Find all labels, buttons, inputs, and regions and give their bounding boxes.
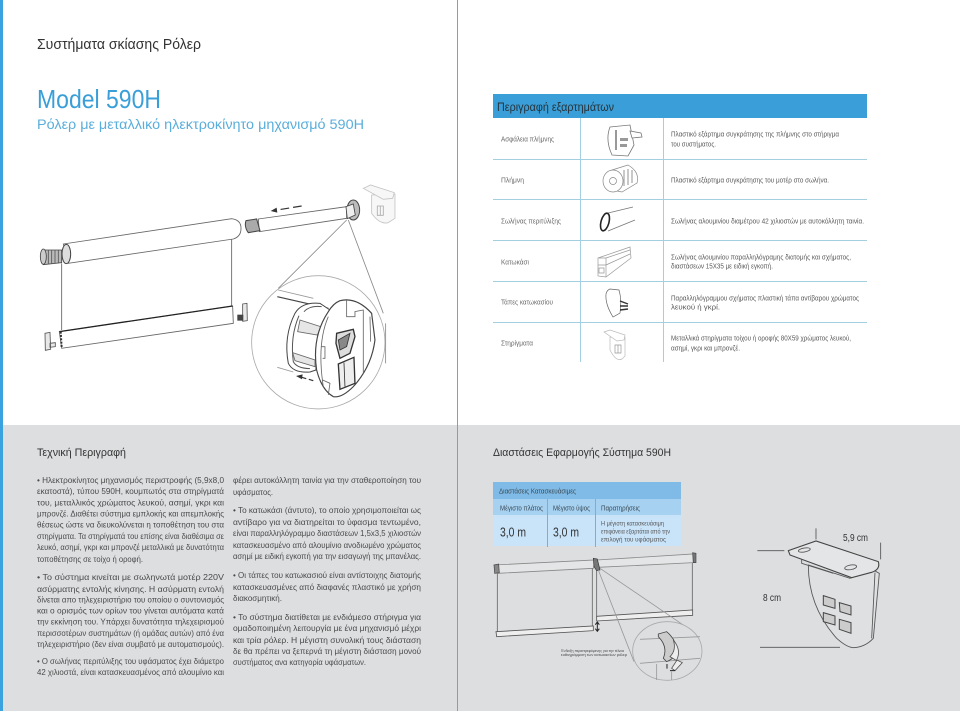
text block: right column xyxy=(233,475,421,667)
table heading: Περιγραφή εξαρτημάτων xyxy=(497,100,614,114)
notes text: Η μέγιστη κατασκευάσιμη xyxy=(601,520,664,528)
text block: right column: αντίβαρο για να διατηρείται το ύφασμα τεντωμένο, xyxy=(233,517,421,527)
centre bracket xyxy=(593,558,600,571)
left roller xyxy=(494,560,595,573)
text block: right column: υφάσματος. xyxy=(233,487,273,497)
icon: safety clip xyxy=(608,125,642,156)
icon: tube xyxy=(599,207,635,232)
bracket dimension drawing xyxy=(757,528,881,648)
notes text xyxy=(601,520,670,544)
dimension lines xyxy=(757,528,881,647)
text block: right column: διακοσμητική. xyxy=(233,593,282,603)
notes text: επιλογή του υφάσματος xyxy=(601,536,666,544)
row: bar caps: Παραλληλόγραμμου σχήματος πλαστική τάπα αντίβαρου χρώματος xyxy=(671,294,860,302)
row: bar caps: λευκού ή γκρί. xyxy=(671,304,720,312)
tube opening xyxy=(62,244,71,264)
text block: right column: ομαδοποιημένη λειτουργία με ένα μηχανισμό μέχρι xyxy=(233,623,421,633)
table header xyxy=(493,94,867,118)
text block: left column: ασύρματης εντολής κίνησης. Η ασύρματη εντολή xyxy=(37,584,224,594)
text block: right column: ασημί με ειδική εγκοπή για την εισαγωγή της μπανέλας. xyxy=(233,551,421,561)
text block: left column: τηλεχειριστήριο (δεν είναι συμβατό με αυτοματισμούς). xyxy=(37,639,224,649)
section title: Συστήματα σκίασης Ρόλερ xyxy=(37,37,201,53)
double arrow xyxy=(595,622,599,631)
text block: right column: συστήματος ανα κατηγορία υφάσματων. xyxy=(233,657,366,667)
icon: bar cap xyxy=(606,289,628,317)
row: plug: Πλαστικό εξάρτημα συγκράτησης του μοτέρ στο σωλήνα. xyxy=(671,176,829,184)
exploded roller diagram xyxy=(40,185,395,409)
dashed arrow xyxy=(275,206,302,210)
row: brackets: Στηρίγματα xyxy=(501,340,533,348)
motor tube xyxy=(258,207,347,232)
text block: right column: δε θα πρέπει να ξεπερνά τη μέγιστη διάσταση μονού xyxy=(233,646,421,656)
text block: left column: του, μεταλλικός χρώματος λευκού, ασημί, γκρι και xyxy=(37,498,224,508)
text block: left column: και ο ορισμός των ορίων του γίνεται αυτόματα κατά xyxy=(37,606,224,616)
row: plug xyxy=(501,176,829,184)
max height header: Μέγιστο ύψος xyxy=(553,504,590,512)
max height value: 3,0 m xyxy=(553,524,579,540)
text block: left column: λευκό, ασημί, γκρι και μπρονζέ μεταλλικά με δυνατότητα xyxy=(37,542,224,552)
roller tube xyxy=(63,219,241,263)
height label: 8 cm xyxy=(763,593,781,604)
row: safety: του συστήματος. xyxy=(671,142,716,148)
body xyxy=(315,300,375,397)
row: plug: Πλήμνη xyxy=(501,178,524,184)
detail circle xyxy=(252,276,385,409)
fabric edges xyxy=(62,239,232,330)
text block: right column: είναι παραλληλόγραμμο διαστάσεων 1,5x3,5 χιλιοστών xyxy=(233,528,421,538)
text block: left column: • Το σύστημα κινείται με σωληνωτά μοτέρ 220V xyxy=(37,572,224,582)
row: brackets: Μεταλλικά στηρίγματα τοίχου ή οροφής 80Χ59 χρώματος λευκού, xyxy=(671,334,851,342)
row: safety: Πλαστικό εξάρτημα συγκράτησης της πλήμνης στο στήριγμα xyxy=(671,130,839,138)
max width header: Μέγιστο πλάτος xyxy=(500,504,543,512)
fine print note xyxy=(560,649,627,657)
bracket plate xyxy=(788,541,879,578)
icon: plug xyxy=(603,165,638,192)
text block: left column: την εκκίνηση του. Υπάρχει δυνατότητα τηλεχειρισμού xyxy=(37,616,224,626)
fine print note: ευθυγράμμιση των κατωκασίων ρόλερ xyxy=(561,653,627,657)
right end cap xyxy=(243,303,247,321)
model subtitle: Ρόλερ με μεταλλικό ηλεκτροκίνητο μηχανισμό 590H xyxy=(37,116,364,132)
text block: left column: τοποθέτησης σε τοίχο ή οροφή. xyxy=(37,554,143,564)
width label: 5,9 cm xyxy=(843,533,868,544)
row: tube: Σωλήνας αλουμινίου διαμέτρου 42 χιλιοστών με αυτοκόλλητη ταινία. xyxy=(671,218,864,226)
text block: right column: • Το κατωκάσι (άντυτο), το οποίο χρησιμοποιείται ως xyxy=(233,505,421,515)
row: bar caps: Τάπες κατωκασίου xyxy=(501,298,553,306)
twin roller diagram xyxy=(494,553,702,680)
model title: Model 590H xyxy=(37,84,161,114)
heading: application dimensions: Διαστάσεις Εφαρμογής Σύστημα 590H xyxy=(493,447,671,459)
left blue edge bar xyxy=(0,0,3,711)
icon: bracket xyxy=(604,330,625,360)
heading: technical description: Τεχνική Περιγραφή xyxy=(37,447,126,459)
header text block xyxy=(37,37,364,132)
row: brackets: ασημί, γκρι και μπρονζέ. xyxy=(671,344,740,352)
row: bottom bar xyxy=(501,254,851,270)
max width value: 3,0 m xyxy=(500,524,526,540)
text block: right column: κατασκευασμένες από διαφανές πλαστικό με χρήση xyxy=(233,582,421,592)
row: tube: Σωλήνας περιτύλιξης xyxy=(501,218,562,226)
text block: right column: φέρει αυτοκόλλητη ταινία για την σταθεροποίηση του xyxy=(233,475,421,485)
callout lines xyxy=(598,568,687,662)
row: bottom bar: διαστάσεων 15Χ35 με ειδική εγκοπή. xyxy=(671,262,773,270)
row: brackets xyxy=(501,334,851,352)
text block: left column: εκατοστά), τύπου 590H, κουμπωτός στα στηρίγματά xyxy=(37,486,224,496)
panel: parts table xyxy=(493,94,867,362)
row: bottom bar: Κατωκάσι xyxy=(501,258,529,266)
fine print note: Ένδειξη περιστρεφόμενης για την τέλεια xyxy=(560,649,624,653)
text block: left column: δίνεται απο τηλεχειριστήριο του οποίου ο συντονισμός xyxy=(37,594,224,604)
text block: right column: • Το σύστημα διατίθεται με ενδιάμεσο στήριγμα για xyxy=(233,612,421,622)
text block: right column: • Οι τάπες του κατωκασιού είναι αντίστοιχης διατομής xyxy=(233,570,421,580)
box xyxy=(338,357,355,389)
text block: left column: • Ο σωλήνας περιτύλιξης του υφάσματος έχει διάμετρο xyxy=(37,656,224,666)
left end cap xyxy=(45,332,55,350)
text block: left column: 42 χιλιοστά, είναι κατασκευασμένος από αλουμίνιο και xyxy=(37,667,224,677)
text block: right column: κατασκευασμένο από αλουμίνιο ανοδιωμένο χρώματος xyxy=(233,540,421,550)
panel: maximum dimensions table xyxy=(493,482,681,547)
row: bar caps xyxy=(501,294,860,312)
text block: left column: περισσοτέρων συστημάτων (ή ομάδας αυτών) από ένα xyxy=(37,628,224,638)
text block: left column: • Ηλεκτροκίνητος μηχανισμός περιστροφής (5,9x8,0 xyxy=(37,475,224,485)
callout lines xyxy=(278,220,386,363)
row: bottom bar: Σωλήνας αλουμινίου παραλληλόγραμης διατομής και σχήματος, xyxy=(671,254,851,262)
table title: Διαστάσεις Κατασκευάσιμες xyxy=(499,486,576,496)
motor heads xyxy=(245,219,260,233)
row: safety xyxy=(501,130,839,148)
bracket slots xyxy=(823,596,851,633)
grey lower band xyxy=(0,425,960,711)
small arrow xyxy=(302,377,313,381)
slot xyxy=(336,329,355,358)
text block: left column: θέσεως ώστε να διευκολύνεται η τοποθέτηση του στα xyxy=(37,520,224,530)
bracket body xyxy=(808,565,879,648)
right roller xyxy=(597,554,693,567)
text block: left column: μπρονζέ. Διαθέτει σύστημα εμπλοκής και απεμπλοκής xyxy=(37,508,224,518)
notes header: Παρατηρήσεις xyxy=(601,504,640,512)
text block: right column: και τρία ρόλερ. Η μέγιστη συνολική τους διάσταση xyxy=(233,635,421,645)
detail circle xyxy=(633,622,702,680)
icon: bottom profile xyxy=(598,247,631,277)
text block: left column: στηρίγματα. Τα στηρίγματά του επίσης είναι διαθέσιμα σε xyxy=(37,531,224,541)
ring xyxy=(287,303,330,372)
plug xyxy=(40,249,62,265)
row: tube xyxy=(501,218,864,226)
text block: left column xyxy=(37,475,224,677)
wall bracket light xyxy=(363,185,395,223)
bottom bar xyxy=(59,306,233,348)
notes text: επιφάνεια εξαρτάται από την xyxy=(601,528,670,536)
row: safety: Ασφάλεια πλήμνης xyxy=(501,136,555,144)
